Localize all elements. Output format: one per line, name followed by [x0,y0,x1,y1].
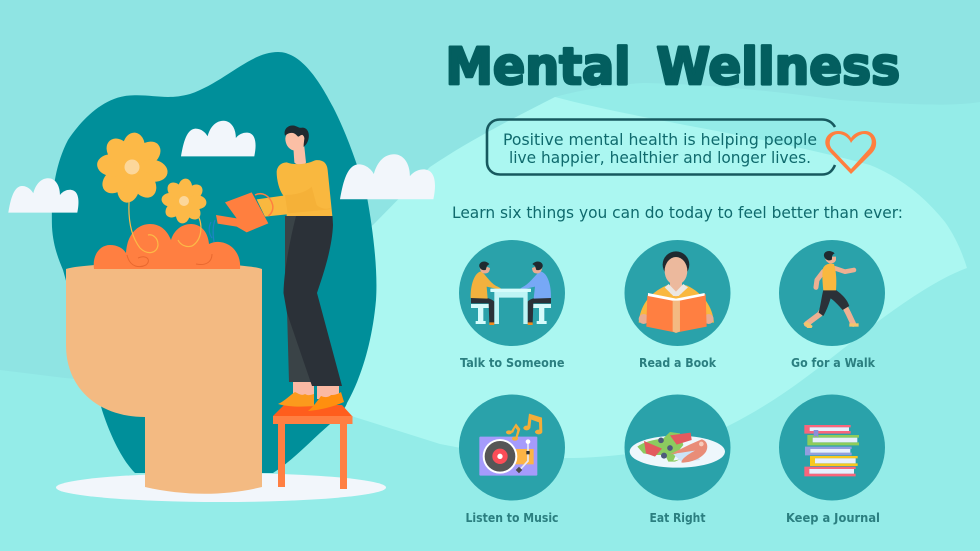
panel: Read a Book [624,240,730,370]
person [216,125,344,411]
icon circle [779,394,885,500]
head silhouette [66,263,262,494]
torso right [520,271,551,299]
icon: person reading [639,251,714,333]
callout: positive mental health [487,120,835,174]
back leg [285,216,312,382]
stools [471,304,551,324]
callout: positive mental health: live happier, healthier and longer lives. [509,148,811,167]
cloud: middle [181,121,256,156]
icon circle [459,240,565,346]
front leg [284,216,342,386]
icon: heart [825,131,876,174]
icon: plate of food (zoom coordinates) [630,432,725,468]
flower stems [129,190,201,253]
label: Keep a Journal [786,510,880,525]
background blob [52,52,376,473]
face [285,130,306,151]
illustration: head with flowers and gardener [8,52,435,502]
table [490,289,531,292]
flower: small [161,178,207,224]
brain [94,224,240,269]
label: Eat Right [650,510,706,525]
torso left [471,271,501,299]
heads [480,267,490,273]
label: Talk to Someone [460,355,564,370]
sweater and arm [257,160,332,217]
label: Listen to Music [466,510,558,525]
panel: Eat Right [624,394,730,525]
title: Wellness [656,38,900,97]
callout: positive mental health: Positive mental health is helping people [503,130,817,149]
ankles [293,382,339,399]
icon: stack of books (zoom coordinates) [804,425,859,476]
cloud: left [8,178,79,213]
label: Read a Book [639,355,717,370]
ear [300,135,304,141]
title [446,38,900,97]
label: Go for a Walk [791,355,876,370]
icon circle [459,394,565,500]
icon: two people at a table (zoom coordinates) [471,262,551,325]
icon circle [779,240,885,346]
icon circle [624,240,730,346]
watering can [216,192,268,232]
trousers [471,297,494,323]
ground ellipse [56,473,386,502]
panel: Go for a Walk [779,240,885,370]
shoes [278,392,314,407]
flower: large [96,132,169,204]
upper body drawn in zoom coordinates [216,125,332,232]
icon circle [624,394,730,500]
panel: Keep a Journal [779,394,885,525]
water drops [209,220,215,242]
icon: person walking [803,251,859,328]
cloud: right [340,154,435,199]
neck [293,147,306,165]
watering can handle [255,194,273,216]
subheading: Learn six things you can do today to feel better than ever: [452,203,903,222]
title: Mental [446,38,630,97]
panel: Listen to Music [459,394,565,525]
icon: record player [479,414,542,476]
hair [285,125,309,147]
panel: Talk to Someone [459,240,565,370]
stool [273,405,352,489]
